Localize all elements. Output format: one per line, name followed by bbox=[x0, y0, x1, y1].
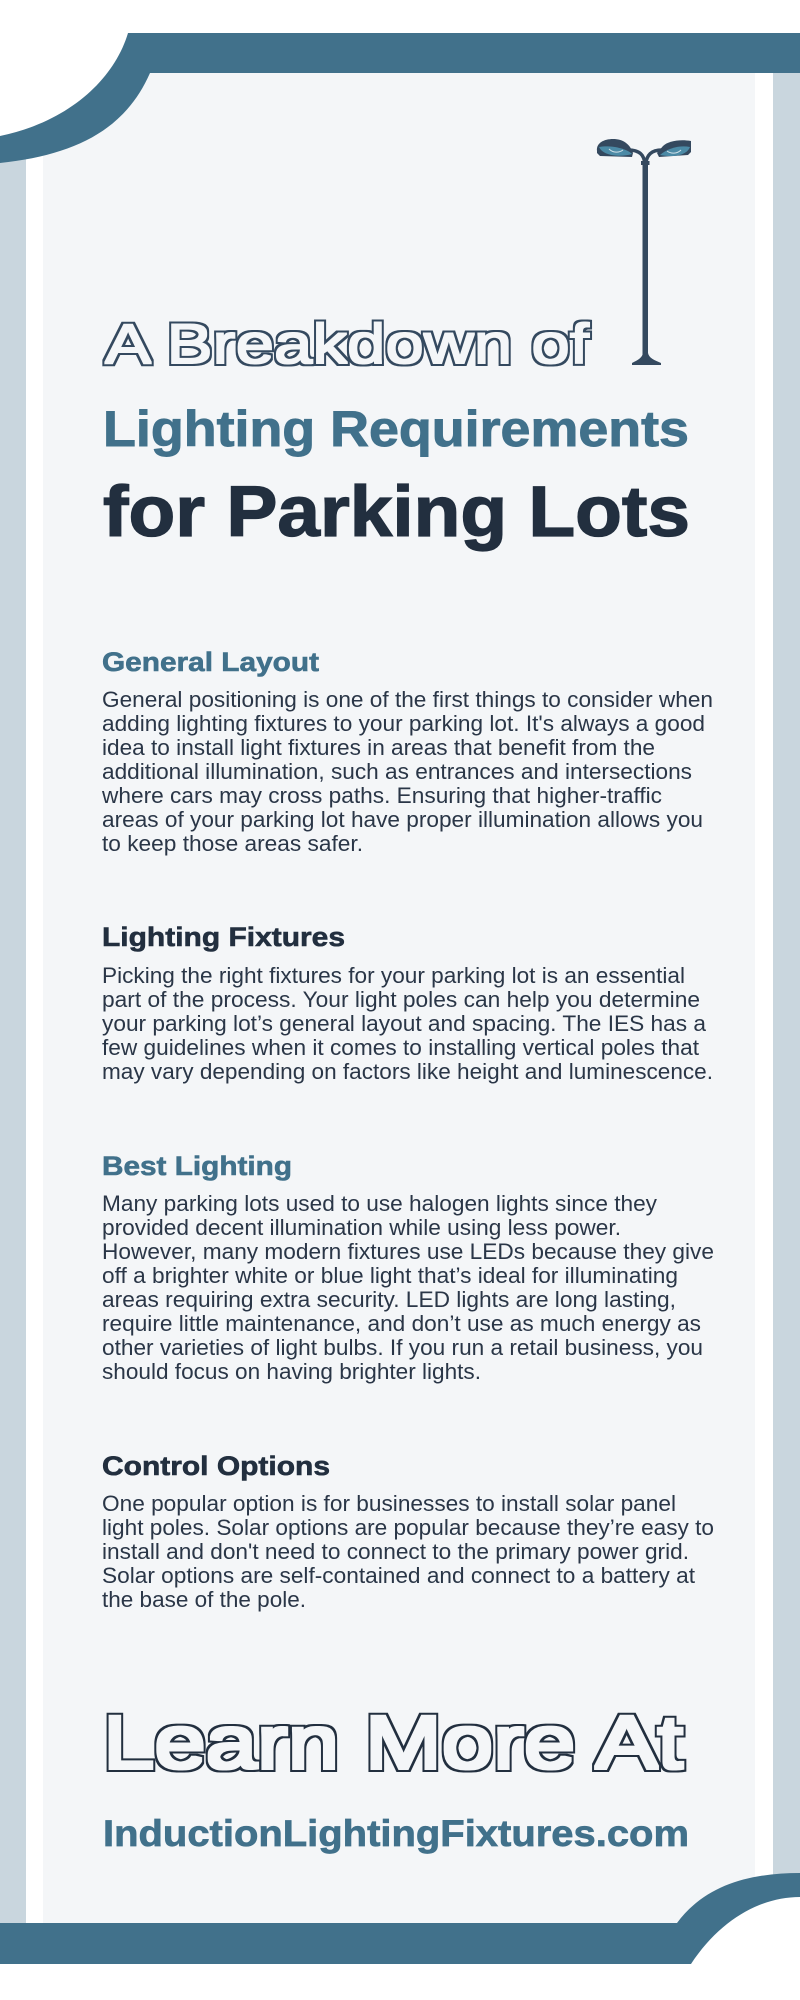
body text: One popular option is for businesses to install solar panel bbox=[102, 1491, 676, 1516]
body text: General positioning is one of the first things to consider when bbox=[102, 687, 713, 712]
body text: part of the process. Your light poles can help you determine bbox=[102, 987, 700, 1012]
website url: InductionLightingFixtures.com bbox=[103, 1813, 689, 1854]
body text: additional illumination, such as entrances and intersections bbox=[102, 759, 692, 784]
section: Best Lighting bbox=[102, 1151, 714, 1384]
body text: Solar options are self-contained and connect to a battery at bbox=[102, 1563, 696, 1588]
body text: However, many modern fixtures use LEDs because they give bbox=[102, 1239, 714, 1264]
body text: areas requiring extra security. LED lights are long lasting, bbox=[102, 1287, 676, 1312]
title line 1: outlined: A Breakdown of bbox=[105, 312, 590, 375]
call to action bbox=[103, 1701, 689, 1854]
body text: areas of your parking lot have proper illumination allows you bbox=[102, 807, 703, 832]
body text: your parking lot’s general layout and spacing. The IES has a bbox=[102, 1011, 706, 1036]
section: Lighting Fixtures bbox=[102, 922, 713, 1084]
body text: Many parking lots used to use halogen lights since they bbox=[102, 1191, 658, 1216]
title line 3: dark: for Parking Lots bbox=[103, 473, 690, 552]
bottom-right corner cutout bbox=[691, 1897, 800, 2000]
body text: idea to install light fixtures in areas that benefit from the bbox=[102, 735, 655, 760]
title bbox=[103, 312, 690, 552]
body text bbox=[102, 963, 713, 1084]
body text: the base of the pole. bbox=[102, 1587, 306, 1612]
body text: provided decent illumination while using less power. bbox=[102, 1215, 621, 1240]
body text: light poles. Solar options are popular because they’re easy to bbox=[102, 1515, 714, 1540]
body text: should focus on having brighter lights. bbox=[102, 1359, 481, 1384]
body text: require little maintenance, and don’t use as much energy as bbox=[102, 1311, 701, 1336]
body text: may vary depending on factors like height and luminescence. bbox=[102, 1059, 713, 1084]
top-left corner cutout bbox=[0, 0, 128, 136]
section: General Layout bbox=[101, 647, 713, 856]
body text bbox=[102, 1491, 714, 1612]
heading: Lighting Fixtures bbox=[102, 922, 345, 952]
heading: Control Options bbox=[102, 1451, 330, 1481]
body text: where cars may cross paths. Ensuring that higher-traffic bbox=[101, 783, 662, 808]
body text: install and don't need to connect to the primary power grid. bbox=[102, 1539, 689, 1564]
section: Control Options bbox=[102, 1451, 714, 1612]
body text: Picking the right fixtures for your parking lot is an essential bbox=[102, 963, 685, 988]
heading: General Layout bbox=[102, 647, 319, 677]
body text bbox=[101, 687, 713, 856]
body text bbox=[102, 1191, 714, 1384]
body text: other varieties of light bulbs. If you run a retail business, you bbox=[102, 1335, 703, 1360]
body text: adding lighting fixtures to your parking lot. It's always a good bbox=[102, 711, 705, 736]
body text: off a brighter white or blue light that’s ideal for illuminating bbox=[102, 1263, 678, 1288]
heading: Best Lighting bbox=[102, 1151, 292, 1181]
body text: few guidelines when it comes to installing vertical poles that bbox=[102, 1035, 700, 1060]
body text: to keep those areas safer. bbox=[102, 831, 363, 856]
title line 2: teal: Lighting Requirements bbox=[103, 401, 689, 457]
outlined heading: Learn More At: Learn More At bbox=[103, 1701, 684, 1784]
bottom banner with curved corner bbox=[0, 1873, 800, 1964]
top banner with curved corner bbox=[0, 33, 800, 163]
icon: double-headed parking lot light pole bbox=[597, 139, 691, 365]
